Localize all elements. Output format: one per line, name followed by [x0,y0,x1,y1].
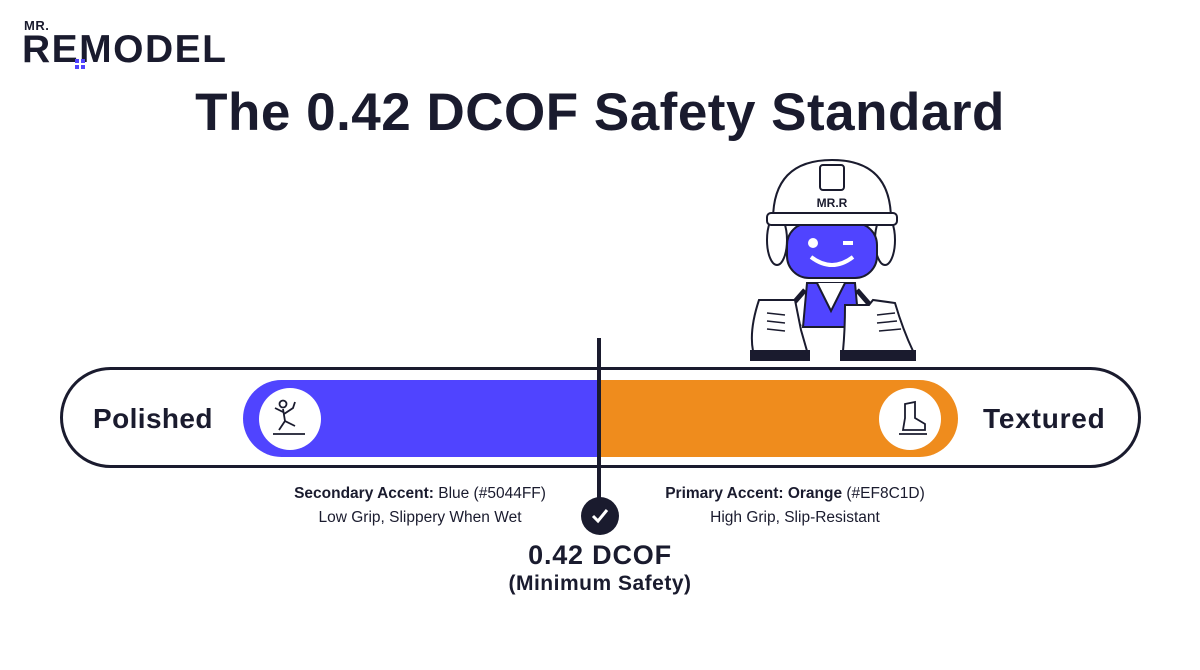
threshold value [508,540,692,595]
caption: orange: High Grip, Slip-Resistant [710,509,880,526]
caption: orange [665,485,925,526]
caption: orange: Primary Accent: Orange (#EF8C1D) [665,485,925,502]
logo: MR. [24,18,49,33]
mascot [750,159,916,361]
title: The 0.42 DCOF Safety Standard [195,83,1005,142]
caption: blue: Low Grip, Slippery When Wet [318,509,522,526]
orange segment [600,380,958,457]
label: textured: Textured [983,403,1106,434]
caption: blue: Secondary Accent: Blue (#5044FF) [294,485,546,502]
caption: blue [294,485,546,526]
scale pill [60,367,1141,468]
blue segment [243,380,601,457]
mascot: MR.R [817,196,848,210]
label: polished: Polished [93,403,213,434]
check icon [581,497,619,535]
icon: boot [879,388,941,450]
threshold value: 0.42 DCOF [528,540,672,570]
threshold line [597,338,601,508]
icon: slipping person [259,388,321,450]
logo: REMODEL [22,28,228,71]
threshold value: (Minimum Safety) [508,572,692,595]
